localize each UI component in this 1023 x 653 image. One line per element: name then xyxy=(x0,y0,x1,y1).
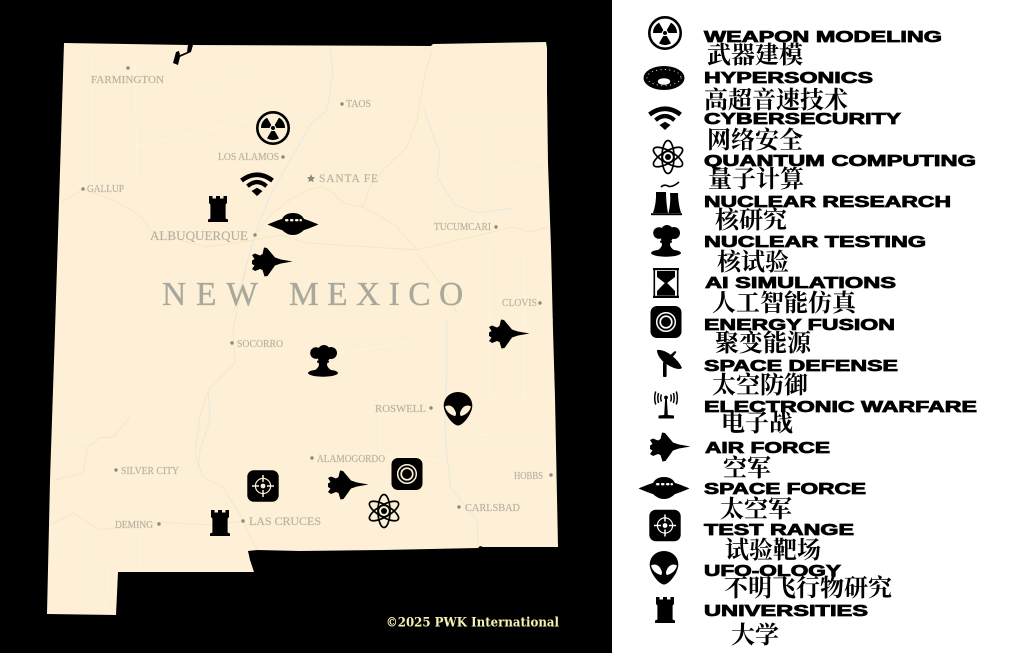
label: weapon modeling: WEAPON MODELING xyxy=(704,29,942,46)
label: hypersonics: HYPERSONICS xyxy=(704,70,873,87)
city labels: SOCORRO xyxy=(237,339,283,350)
legend item: UFO-ology xyxy=(650,551,892,602)
map title: New Mexico: MEXICO xyxy=(289,276,472,313)
black map background xyxy=(0,0,612,653)
icon: air force, Albuquerque xyxy=(252,248,292,276)
icon: concentric rings xyxy=(650,306,682,338)
label: Chinese: 不明飞行物研究 xyxy=(724,575,892,602)
label: nuclear testing: NUCLEAR TESTING xyxy=(704,234,926,251)
label: Chinese: 量子计算 xyxy=(708,166,804,193)
map title: New Mexico xyxy=(162,276,472,313)
icon: wifi xyxy=(650,109,680,130)
icon: quantum computing xyxy=(367,494,401,528)
icon: space force xyxy=(268,213,318,235)
icon: flying saucer xyxy=(638,477,690,499)
label: test range: TEST RANGE xyxy=(704,522,854,539)
label: air force: AIR FORCE xyxy=(705,440,830,457)
icon: mushroom cloud xyxy=(651,225,681,257)
label: Chinese: 高超音速技术 xyxy=(704,86,848,114)
icon: energy fusion xyxy=(392,458,422,490)
label: nuclear research: NUCLEAR RESEARCH xyxy=(704,194,951,211)
icon: weapon modeling, Los Alamos xyxy=(257,112,289,144)
city labels: CARLSBAD xyxy=(465,503,520,514)
legend item: AI simulations xyxy=(653,268,896,317)
city labels: HOBBS xyxy=(514,471,543,482)
label: Chinese: 空军 xyxy=(723,454,771,482)
county lines xyxy=(60,50,555,612)
city labels: SILVER CITY xyxy=(121,466,179,477)
panel: New Mexico map xyxy=(47,42,558,615)
label: universities: UNIVERSITIES xyxy=(704,603,868,620)
label: AI simulations: AI SIMULATIONS xyxy=(705,275,896,292)
icon: air force, Alamogordo xyxy=(328,470,368,500)
label: Chinese: 武器建模 xyxy=(707,42,803,69)
label: Chinese: 太空军 xyxy=(720,495,792,523)
panel: legend xyxy=(638,17,977,649)
icon: test range xyxy=(247,470,279,502)
legend item: electronic warfare xyxy=(655,392,977,437)
rivers xyxy=(198,47,513,547)
legend item: nuclear research xyxy=(651,182,951,234)
icon: alien head xyxy=(650,551,678,584)
legend item: hypersonics xyxy=(644,66,873,114)
icon: university, Las Cruces xyxy=(210,510,230,536)
icon: jet xyxy=(650,432,690,462)
map title: New Mexico: NEW xyxy=(162,276,268,313)
city labels: CLOVIS xyxy=(502,298,537,309)
legend item: cybersecurity xyxy=(650,109,902,154)
label: Chinese: 核研究 xyxy=(715,207,787,234)
legend item: energy fusion xyxy=(650,306,895,357)
city labels: SANTA FE xyxy=(319,173,378,185)
legend item: quantum computing xyxy=(651,140,976,193)
city labels: LAS CRUCES xyxy=(249,514,321,528)
icon: UFO-ology, Roswell xyxy=(444,392,472,426)
roads xyxy=(50,50,548,550)
legend item: test range xyxy=(649,510,854,564)
city labels: LOS ALAMOS xyxy=(218,152,279,163)
icon: atom xyxy=(651,140,685,174)
label: quantum computing: QUANTUM COMPUTING xyxy=(704,153,976,170)
label: electronic warfare: ELECTRONIC WARFARE xyxy=(704,399,977,416)
icon: tower xyxy=(655,597,675,623)
city labels: GALLUP xyxy=(87,184,124,195)
label: Chinese: 人工智能仿真 xyxy=(712,290,859,317)
city labels: TAOS xyxy=(346,99,371,110)
legend item: air force xyxy=(650,432,830,482)
label: space defense: SPACE DEFENSE xyxy=(704,358,898,375)
city labels: FARMINGTON xyxy=(91,75,164,86)
icon: radio antenna xyxy=(655,392,677,418)
label: cybersecurity: CYBERSECURITY xyxy=(704,111,902,128)
legend item: space force xyxy=(638,477,866,523)
city labels: ALAMOGORDO xyxy=(317,454,385,465)
icon: crosshair target xyxy=(649,510,681,541)
icon: nuclear testing xyxy=(308,345,338,377)
icon: disc xyxy=(644,66,684,90)
icon: cybersecurity xyxy=(242,175,272,196)
label: Chinese: 电子战 xyxy=(721,410,793,437)
legend item: nuclear testing xyxy=(651,225,926,276)
copyright: ©2025 PWK International xyxy=(386,614,559,630)
label: space force: SPACE FORCE xyxy=(704,481,866,498)
label: Chinese: 核试验 xyxy=(717,249,789,276)
icon: radiation xyxy=(649,17,681,49)
state silhouette xyxy=(47,42,558,615)
label: Chinese: 试验靶场 xyxy=(725,537,821,564)
city labels xyxy=(81,66,553,531)
icon: university, Albuquerque xyxy=(208,196,228,222)
label: Chinese: 聚变能源 xyxy=(715,329,813,357)
city labels: ALBUQUERQUE xyxy=(150,229,248,243)
label: Chinese: 网络安全 xyxy=(707,127,803,154)
city labels: ROSWELL xyxy=(375,404,426,415)
city labels: DEMING xyxy=(115,520,153,531)
label: Chinese: 太空防御 xyxy=(712,371,808,399)
city labels: TUCUMCARI xyxy=(434,222,491,233)
icon: air force, Clovis xyxy=(489,320,530,348)
legend item: weapon modeling xyxy=(649,17,942,69)
label: Chinese: 大学 xyxy=(731,622,779,649)
legend item: space defense xyxy=(657,350,898,399)
icon: cooling towers xyxy=(651,182,682,215)
icon: satellite dish xyxy=(657,350,682,377)
label: energy fusion: ENERGY FUSION xyxy=(704,317,895,334)
white legend background xyxy=(612,0,1023,653)
label: UFO-ology: UFO-OLOGY xyxy=(704,563,842,580)
legend item: universities xyxy=(655,597,868,649)
icon: hourglass xyxy=(653,268,679,298)
